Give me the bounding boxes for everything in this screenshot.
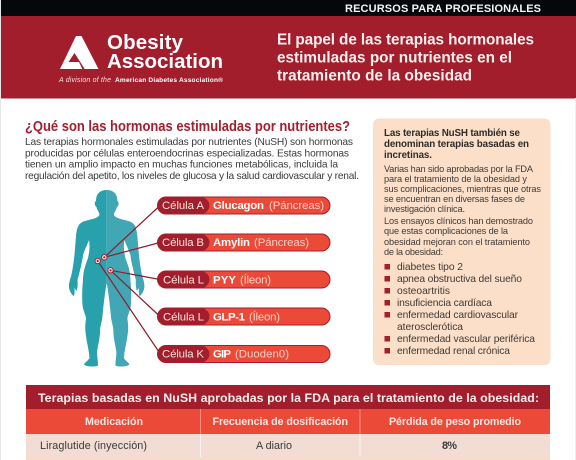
table header row: Frecuencia de dosificación — [212, 416, 348, 428]
table row: Liraglutide — [26, 434, 550, 460]
intro paragraph: regulación del apetito, los niveles de glucosa y la salud cardiovascular y renal. — [25, 171, 359, 182]
complications list: diabetes tipo 2 — [397, 262, 463, 273]
label: Célula B Amylin: (Páncreas) — [254, 237, 309, 249]
title: El papel de las terapias hormonales — [277, 32, 534, 48]
panel paragraph: clinical trials: Los ensayos clínicos han demostrado — [384, 216, 533, 226]
intro paragraph: tienen un amplio impacto en muchas funciones metabólicas, incluida la — [25, 160, 338, 170]
label: Célula L GLP-1 — [158, 308, 330, 325]
panel paragraph: clinical trials: de la obesidad: — [384, 247, 443, 257]
panel paragraph: FDA approval: sus complicaciones, mientras que otras — [384, 184, 541, 194]
top bar: resources label: RECURSOS PARA PROFESIONALES — [345, 3, 541, 15]
table row: Liraglutide: A diario — [256, 440, 292, 452]
label: Célula L PYY: (Íleon) — [240, 274, 271, 286]
table title: Terapias basadas en NuSH aprobadas por la FDA para el tratamiento de la obesidad: — [38, 391, 539, 405]
connector lines from organs to cell labels — [98, 206, 160, 354]
intro paragraph: Las terapias hormonales estimuladas por nutrientes (NuSH) son hormonas — [25, 137, 353, 148]
panel paragraph: FDA approval: investigación clínica. — [384, 204, 465, 214]
panel paragraph: FDA approval: para el tratamiento de la obesidad y — [384, 174, 527, 184]
complications list: aterosclerótica — [397, 322, 463, 333]
panel paragraph: FDA approval: se encuentran en diversas fases de — [384, 194, 525, 204]
label: Célula A Glucagon: Glucagon — [213, 200, 264, 212]
table row: Liraglutide: Liraglutide (inyección) — [40, 440, 147, 452]
table row: next row edge — [26, 457, 550, 460]
label: Célula L PYY — [158, 271, 330, 288]
table title — [26, 385, 550, 409]
title — [277, 32, 534, 84]
label: Célula L GLP-1: (Íleon) — [249, 310, 280, 324]
table: FDA approved therapies — [26, 385, 550, 460]
icon: human body silhouette — [69, 190, 144, 367]
label: Célula B Amylin: Amylin — [213, 237, 250, 249]
panel paragraph: clinical trials — [384, 216, 533, 257]
complications list: osteoartritis — [397, 286, 450, 297]
panel paragraph: clinical trials: obesidad mejoran con el tratamiento — [384, 237, 530, 247]
logo: Obesity Association: A division of the — [58, 77, 111, 84]
organ marker dots — [95, 255, 113, 273]
label: Célula L GLP-1: Célula L — [163, 312, 204, 324]
intro paragraph: producidas por células enteroendocrinas especializadas. Estas hormonas — [25, 148, 349, 160]
label: Célula K GIP: (Duoden0) — [235, 348, 289, 360]
complications list: insuficiencia cardíaca — [397, 298, 492, 309]
panel paragraph: FDA approval: Varias han sido aprobadas por la FDA — [384, 164, 534, 174]
complications list: enfermedad cardiovascular — [397, 310, 519, 321]
heading: what are nutrient-stimulated hormones: ¿Qué son las hormonas estimuladas por nutrientes? — [25, 118, 350, 135]
logo: Obesity Association: American Diabetes Association® — [115, 76, 223, 84]
complications list — [384, 262, 535, 357]
icon: logo triangle — [60, 36, 98, 70]
table row: Liraglutide: 8% — [442, 440, 457, 452]
label: Célula B Amylin — [158, 234, 330, 251]
panel: incretin therapies — [373, 118, 550, 365]
table header row: Medicación — [85, 416, 143, 428]
label: Célula A Glucagon: Célula A — [162, 200, 204, 212]
panel paragraph: clinical trials: que estas complicaciones de la — [384, 226, 509, 236]
panel heading — [384, 128, 529, 161]
complications list: enfermedad vascular periférica — [397, 334, 535, 345]
table header row: Pérdida de peso promedio — [389, 416, 521, 428]
logo: Obesity Association: Obesity — [107, 31, 184, 54]
panel heading: denominan terapias basadas en — [384, 139, 529, 150]
label: Célula B Amylin: Célula B — [162, 237, 204, 249]
label: Célula L PYY: PYY — [213, 274, 236, 286]
top bar: resources label — [1, 0, 576, 16]
logo: Obesity Association: Association — [107, 50, 223, 73]
title: estimuladas por nutrientes en el — [277, 50, 512, 66]
label: Célula L PYY: Célula L — [163, 274, 204, 286]
panel heading: Las terapias NuSH también se — [384, 128, 521, 139]
label: Célula K GIP: Célula K — [162, 348, 204, 360]
header banner — [1, 16, 576, 98]
logo: Obesity Association — [58, 31, 223, 84]
label: Célula K GIP — [158, 346, 330, 362]
label: Célula A Glucagon: (Páncreas) — [269, 200, 324, 212]
label: Célula K GIP: GIP — [213, 348, 231, 360]
complications list: enfermedad renal crónica — [397, 346, 510, 357]
intro paragraph — [25, 137, 359, 182]
table header row — [26, 409, 550, 434]
complications list: apnea obstructiva del sueño — [397, 274, 522, 285]
title: tratamiento de la obesidad — [277, 68, 472, 84]
panel paragraph: FDA approval — [384, 164, 541, 214]
label: Célula L GLP-1: GLP-1 — [213, 312, 246, 324]
label: Célula A Glucagon — [158, 197, 330, 214]
panel heading: incretinas. — [384, 150, 432, 161]
